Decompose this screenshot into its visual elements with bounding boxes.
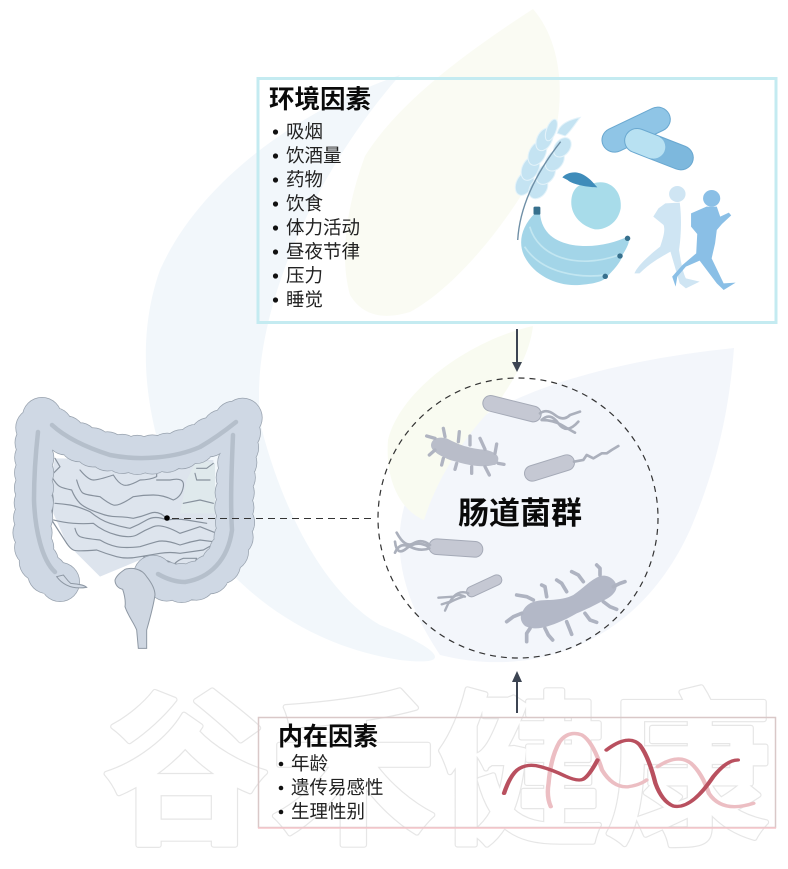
icon: pills bbox=[615, 119, 681, 158]
bacterium: top-left spiky bbox=[427, 428, 504, 475]
small intestine bbox=[50, 458, 217, 577]
list: environmental factors: 饮食 bbox=[286, 193, 324, 214]
bacterium: left rod bbox=[395, 533, 475, 553]
icon: apple bbox=[562, 172, 621, 229]
list: intrinsic factors bbox=[279, 753, 384, 822]
bacterium: large spiky bbox=[507, 565, 625, 642]
large intestine bbox=[32, 414, 243, 583]
list: environmental factors: 睡觉 bbox=[286, 289, 323, 310]
list: intrinsic factors: 年龄 bbox=[291, 753, 328, 774]
watermark text: 谷禾健康 bbox=[103, 681, 771, 866]
bacterium: small rod bbox=[438, 580, 497, 611]
bacterium: right rod bbox=[532, 446, 618, 473]
list: environmental factors: 药物 bbox=[286, 169, 323, 190]
icon: DNA helix bbox=[504, 733, 753, 807]
rectum bbox=[115, 568, 155, 648]
list: environmental factors: 压力 bbox=[286, 265, 323, 286]
icon: runners bbox=[634, 186, 736, 290]
arrow: intrinsic to microbiota bbox=[512, 671, 522, 713]
heading: environmental factors: 环境因素 bbox=[269, 86, 371, 114]
list: environmental factors: 昼夜节律 bbox=[286, 241, 360, 262]
heading: intrinsic factors: 内在因素 bbox=[278, 723, 378, 751]
panel: intrinsic factors bbox=[258, 718, 776, 828]
list: environmental factors: 饮酒量 bbox=[286, 145, 342, 166]
panel: environmental factors bbox=[258, 78, 776, 322]
illustration: intestine bbox=[32, 414, 243, 648]
panel: gut microbiota circle bbox=[378, 378, 658, 658]
list: environmental factors bbox=[273, 121, 360, 310]
background leaf logo bbox=[146, 9, 734, 662]
icon: bananas bbox=[521, 207, 630, 285]
list: environmental factors: 体力活动 bbox=[286, 217, 360, 238]
list: environmental factors: 吸烟 bbox=[286, 121, 323, 142]
arrow: environment to microbiota bbox=[512, 329, 522, 372]
watermark text: 谷禾健康 bbox=[103, 681, 771, 866]
heading: gut microbiota: 肠道菌群 bbox=[458, 496, 582, 531]
appendix bbox=[57, 575, 87, 588]
icon: wheat bbox=[512, 117, 580, 240]
bacterium: top rod bbox=[491, 403, 580, 433]
list: intrinsic factors: 生理性别 bbox=[291, 801, 365, 822]
connector: intestine to microbiota bbox=[164, 515, 376, 521]
list: intrinsic factors: 遗传易感性 bbox=[291, 777, 384, 798]
